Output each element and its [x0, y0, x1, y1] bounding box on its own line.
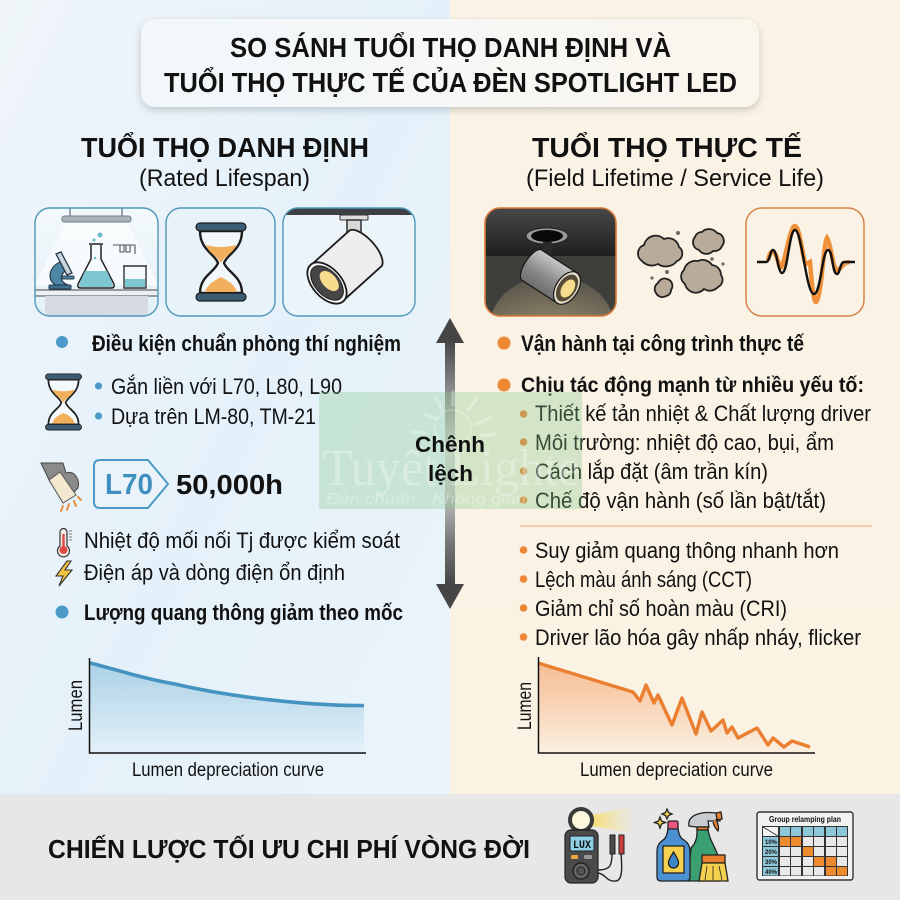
- text: junction temperature: Nhiệt độ mối nối Tj được kiểm soát: [84, 528, 400, 553]
- watermark: Đèn chuẩn - Không gian: [326, 490, 526, 508]
- chart: rated lumen depreciation curve: Lumen depreciation curve: [132, 760, 324, 781]
- icon: small spotlight: [41, 463, 81, 511]
- icon: group relamping plan: Group relamping plan: [769, 815, 841, 824]
- right bullet: impact factors: Chịu tác động mạnh từ nhiều yếu tố:: [521, 373, 864, 397]
- heading: field lifetime: TUỔI THỌ THỰC TẾ: [532, 132, 802, 163]
- icon: lux meter: [565, 806, 636, 883]
- label: gap: lệch: [428, 461, 473, 486]
- heading: rated lifespan: (Rated Lifespan): [139, 165, 310, 192]
- chart: field lumen depreciation curve: Lumen: [515, 682, 536, 730]
- right bullet: real site operation: Vận hành tại công trình thực tế: [521, 331, 805, 356]
- L70 tag and rated hours: L70: [105, 469, 153, 501]
- icon: group relamping plan: 10%: [765, 840, 778, 846]
- L70 tag and rated hours: [94, 460, 283, 508]
- bottom band: [0, 794, 900, 900]
- icon: group relamping plan: 30%: [765, 860, 778, 866]
- right list: degradation effects: Driver lão hóa gây nhấp nháy, flicker: [535, 625, 861, 650]
- icon: lightning bolt: [56, 561, 72, 586]
- L70 tag and rated hours: 50,000h: [176, 469, 283, 500]
- left block: standards with hourglass icon: [46, 374, 342, 430]
- right list: degradation effects: Lệch màu ánh sáng (CCT): [535, 567, 752, 592]
- title: TUỔI THỌ THỰC TẾ CỦA ĐÈN SPOTLIGHT LED: [164, 66, 737, 98]
- right list: degradation effects: [520, 538, 861, 650]
- icon: thermometer: [58, 528, 72, 557]
- left block: standards with hourglass icon: Gắn liền với L70, L80, L90: [111, 374, 342, 399]
- right list: degradation effects: Giảm chỉ số hoàn màu (CRI): [535, 596, 787, 621]
- right bullet: impact factors: Môi trường: nhiệt độ cao, bụi, ẩm: [535, 430, 834, 455]
- heading: lifecycle cost strategy: CHIẾN LƯỢC TỐI ƯU CHI PHÍ VÒNG ĐỜI: [48, 834, 530, 864]
- left block: standards with hourglass icon: Dựa trên LM-80, TM-21: [111, 404, 316, 429]
- icon: dust clouds: [638, 229, 725, 297]
- background: right cream half: [450, 0, 900, 900]
- title: SO SÁNH TUỔI THỌ DANH ĐỊNH VÀ: [230, 32, 671, 63]
- icon: group relamping plan: 40%: [765, 870, 778, 876]
- icon: group relamping plan: 20%: [765, 850, 778, 856]
- chart: field lumen depreciation curve: Lumen depreciation curve: [580, 760, 773, 781]
- icon: hourglass panel: [166, 208, 275, 316]
- double arrow: gap: [436, 318, 464, 609]
- watermark: [319, 392, 582, 509]
- heading: field lifetime: [526, 132, 824, 192]
- right bullet: impact factors: [498, 373, 871, 513]
- right bullet: impact factors: Thiết kế tản nhiệt & Chất lượng driver: [535, 401, 871, 426]
- title: [141, 19, 759, 107]
- right list: degradation effects: Suy giảm quang thông nhanh hơn: [535, 538, 839, 563]
- chart: rated lumen depreciation curve: [66, 658, 366, 781]
- icon: lux meter: LUX: [573, 840, 591, 852]
- icon: recessed spotlight in dark ceiling: [484, 207, 617, 317]
- right bullet: impact factors: Chế độ vận hành (số lần bật/tắt): [535, 488, 826, 513]
- label: gap: Chênh: [415, 432, 485, 457]
- icon: track spotlight: [283, 208, 415, 316]
- icon: cleaning supplies: [654, 809, 728, 881]
- background: left blue half: [0, 0, 450, 900]
- left bullet: lumen depreciation: Lượng quang thông giảm theo mốc: [84, 600, 403, 625]
- watermark: Tuyết Lighte: [322, 440, 580, 497]
- left bullet: lab conditions: Điều kiện chuẩn phòng thí nghiệm: [92, 331, 401, 356]
- heading: rated lifespan: [81, 132, 369, 192]
- heading: rated lifespan: TUỔI THỌ DANH ĐỊNH: [81, 132, 369, 163]
- icon: laboratory: [35, 208, 158, 316]
- chart: field lumen depreciation curve: [515, 657, 815, 781]
- heading: field lifetime: (Field Lifetime / Service Life): [526, 165, 824, 192]
- label: gap: [415, 432, 485, 486]
- icon: flicker waveform: [746, 208, 864, 316]
- chart: rated lumen depreciation curve: Lumen: [66, 680, 87, 731]
- icon: group relamping plan: [757, 812, 853, 880]
- right bullet: impact factors: Cách lắp đặt (âm trần kín): [535, 459, 768, 484]
- text: voltage and current: Điện áp và dòng điện ổn định: [84, 560, 345, 585]
